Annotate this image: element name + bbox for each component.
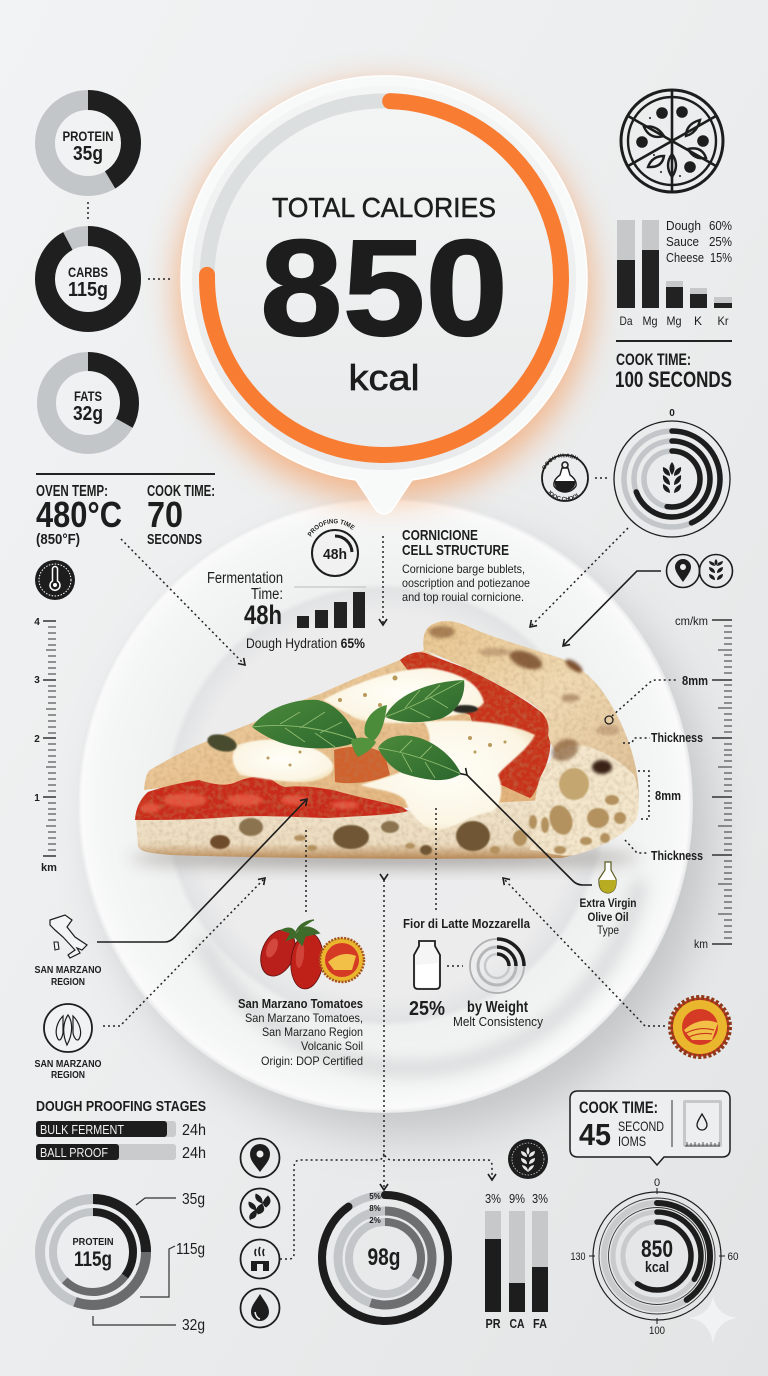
chart legend: Cheese	[666, 250, 704, 265]
icon: italy map: REGION	[51, 976, 85, 988]
donut: fats	[46, 362, 130, 444]
cornicione note: CORNICIONE	[402, 527, 478, 544]
stacked bars: pr ca fa: 3%	[532, 1191, 548, 1206]
icon: olive oil bottle: Olive Oil	[588, 910, 628, 924]
hydration label: Dough Hydration 65%	[246, 635, 365, 651]
connector dots	[595, 477, 608, 479]
fermentation block: Time:	[251, 586, 283, 603]
dough proofing stages: DOUGH PROOFING STAGES	[36, 1098, 206, 1115]
oregano flecks	[266, 676, 506, 766]
donut: carbs	[45, 236, 131, 322]
bar chart: composition: K	[694, 314, 702, 328]
main calorie gauge	[176, 76, 592, 514]
sauce front	[135, 776, 408, 820]
ruler labels: km	[41, 862, 57, 874]
crumb layer	[136, 790, 638, 859]
cook time callout: SECOND	[618, 1118, 664, 1134]
dough proofing stages	[36, 1098, 206, 1162]
calories value: 850	[260, 212, 508, 365]
icon: san marzano tomatoes badge	[34, 1004, 102, 1081]
ruler labels: Thickness	[651, 848, 703, 863]
sparkle mark	[689, 1296, 737, 1344]
donut: protein	[45, 100, 131, 186]
left ruler	[34, 617, 57, 874]
top dough	[144, 650, 548, 808]
icon: pizza	[621, 90, 723, 192]
radial gauge: wheat	[614, 408, 730, 537]
radial chart: 850 kcal: 60	[728, 1251, 738, 1263]
ball proof bar: 24h	[182, 1145, 206, 1162]
icon: drop gauge	[683, 1100, 722, 1147]
bar chart: composition: Mg	[642, 314, 658, 328]
arrows and connectors	[97, 528, 677, 1190]
donut: protein: PROTEIN	[62, 129, 114, 144]
mozzarella block: Melt Consistency	[453, 1014, 543, 1029]
ruler labels: 8mm	[682, 673, 708, 688]
icon: italy map: SAN MARZANO	[34, 964, 102, 976]
cook time: 70 seconds: 70	[147, 494, 183, 535]
chart leaders	[93, 1198, 176, 1325]
cook time: 100 seconds: COOK TIME:	[616, 351, 691, 369]
radial chart: 850 kcal: 850	[641, 1236, 673, 1263]
cook time callout: 45	[579, 1117, 611, 1152]
pizza slice	[130, 621, 640, 868]
radial chart: protein: 115g	[176, 1241, 205, 1258]
icon: proofing time dial: PROOFING TIME	[307, 518, 355, 537]
icon: proofing time dial	[307, 518, 359, 577]
cook time: 100 seconds	[615, 341, 732, 392]
fermentation block	[207, 518, 366, 651]
radial chart: 850 kcal	[570, 1177, 738, 1337]
radial chart: protein: 115g	[74, 1248, 112, 1271]
icon: italy map	[34, 915, 102, 988]
ruler labels: 8mm	[655, 788, 681, 803]
oven temperature	[36, 474, 215, 548]
mozzarella block: by Weight	[467, 999, 529, 1016]
tomato description	[238, 996, 363, 1068]
radial chart: protein: PROTEIN	[72, 1236, 114, 1248]
fermentation block: 48h	[244, 600, 282, 630]
tomato description: Volcanic Soil	[301, 1039, 363, 1053]
radial chart: 98g	[322, 1192, 448, 1321]
donut: fats: 32g	[73, 403, 103, 425]
tomato description: San Marzano Region	[262, 1025, 363, 1039]
bulk ferment bar: 24h	[182, 1122, 206, 1139]
chart legend: 60%	[709, 218, 732, 233]
sauce top	[400, 652, 550, 798]
ball proof bar: BALL PROOF	[40, 1145, 108, 1160]
icon: san marzano tomatoes badge: SAN MARZANO	[34, 1058, 102, 1070]
stacked bars: pr ca fa: PR	[486, 1316, 501, 1331]
chart legend: 25%	[709, 234, 732, 249]
connector dots	[88, 202, 172, 279]
cornicione note: and top rouial cornicione.	[402, 590, 524, 604]
bar chart: composition	[617, 218, 732, 328]
gauge track	[207, 101, 561, 455]
kcal unit: kcal	[348, 357, 420, 398]
tomato description: San Marzano Tomatoes,	[245, 1011, 363, 1025]
icon: san marzano tomatoes badge: REGION	[51, 1069, 85, 1081]
fermentation label: Fermentation	[207, 570, 283, 587]
radial chart: 98g: 2%	[369, 1216, 381, 1225]
bar chart: composition: Da	[620, 314, 633, 328]
crust cross-section	[530, 745, 639, 856]
ruler labels	[651, 614, 708, 951]
radial chart: 850 kcal: 100	[649, 1325, 665, 1337]
mozzarella	[233, 668, 535, 830]
tomato description: Origin: DOP Certified	[261, 1054, 363, 1068]
radial chart: 98g: 8%	[369, 1204, 381, 1213]
ruler labels: Thickness	[651, 730, 703, 745]
char spots	[429, 626, 620, 774]
donut: carbs: CARBS	[68, 265, 108, 280]
cook time callout: COOK TIME:	[579, 1098, 658, 1117]
radial chart: 98g: 98g	[368, 1244, 400, 1271]
icon: flask badge: JOOC CHOOI	[548, 490, 578, 500]
donut: carbs: 115g	[68, 279, 108, 301]
radial chart: 98g: 5%	[369, 1192, 381, 1201]
stacked bars: pr ca fa: 9%	[509, 1191, 525, 1206]
cornicione note: ooscription and potiezanoe	[402, 576, 530, 590]
icon: pin	[240, 1138, 280, 1178]
icon: milk bottle	[414, 941, 440, 989]
bar chart: composition: Mg	[666, 314, 682, 328]
tomato description: San Marzano Tomatoes	[238, 996, 363, 1011]
chart legend	[666, 218, 732, 265]
oven temperature: OVEN TEMP:	[36, 483, 108, 500]
icon: location pin	[666, 554, 700, 588]
dop badge small	[320, 938, 364, 982]
bulk ferment bar	[36, 1121, 206, 1139]
stacked bars: pr ca fa: 3%	[485, 1191, 501, 1206]
bar chart: composition: Kr	[718, 314, 729, 328]
ruler labels: 4	[34, 617, 40, 628]
icon: thermometer	[35, 560, 75, 600]
cook time: 70 seconds: COOK TIME:	[147, 483, 215, 500]
radial chart: protein: 35g	[182, 1191, 205, 1208]
air holes	[210, 768, 626, 855]
ruler labels	[34, 617, 57, 874]
ruler labels: 3	[34, 675, 40, 686]
icon: black wheat badge	[508, 1139, 548, 1179]
melt rings	[470, 939, 524, 993]
icon: wheat badge	[700, 554, 732, 588]
cook time: 100 seconds: 100 SECONDS	[615, 367, 732, 392]
radial chart: protein: 32g	[182, 1317, 205, 1334]
cook time: 70 seconds: SECONDS	[147, 531, 202, 548]
donut: fats: FATS	[74, 389, 102, 404]
icon: wheat	[240, 1188, 280, 1228]
gauge value arc	[201, 95, 567, 461]
oven temperature: 480°C	[36, 494, 122, 535]
crust rim	[423, 621, 639, 808]
cornicione note: CELL STRUCTURE	[402, 542, 509, 559]
icon column	[240, 1138, 280, 1328]
sauce highlights	[140, 793, 359, 813]
mozzarella block: Fior di Latte Mozzarella	[403, 916, 531, 931]
radial chart: protein	[37, 1191, 205, 1334]
herb speck	[205, 705, 478, 755]
icon: proofing time dial: 48h	[323, 546, 347, 563]
right ruler	[712, 620, 732, 944]
mozzarella block: 25%	[409, 998, 445, 1020]
branching connector	[280, 1153, 492, 1259]
icon: flask badge: OOOU KLASH	[542, 453, 578, 470]
mozzarella block	[403, 916, 543, 1029]
ruler labels: km	[694, 937, 708, 951]
radial chart: 850 kcal: kcal	[645, 1259, 669, 1276]
stacked bars: pr ca fa: FA	[533, 1316, 548, 1331]
tomatoes illustration	[254, 920, 364, 991]
icon: olive oil bottle: Type	[597, 923, 619, 937]
plate	[77, 497, 711, 1136]
donut: protein: 35g	[73, 143, 103, 165]
gauge disc with pointer	[181, 76, 587, 514]
icon: oven	[240, 1240, 280, 1278]
basil leaves	[252, 680, 464, 780]
cook time: 70 seconds	[147, 483, 215, 548]
bulk ferment bar: BULK FERMENT	[40, 1122, 124, 1137]
cook time callout: IOMS	[618, 1133, 646, 1149]
stacked bars: pr ca fa: CA	[510, 1316, 525, 1331]
ruler labels: 2	[34, 734, 40, 745]
stacked bars: pr ca fa	[485, 1191, 548, 1331]
radial gauge: wheat: 0	[669, 408, 675, 419]
icon: olive oil bottle: Extra Virgin	[580, 896, 636, 910]
cornicione note: Cornicione barge bublets,	[402, 562, 525, 576]
chart legend: 15%	[710, 250, 732, 265]
dop seal	[670, 998, 730, 1056]
chart legend: Dough	[666, 218, 701, 233]
icon: olive oil bottle	[580, 862, 636, 937]
gauge face	[192, 86, 576, 470]
icon: wheat	[663, 462, 681, 493]
ruler labels: cm/km	[675, 614, 708, 628]
icon: water drop	[240, 1288, 280, 1328]
chart legend: Sauce	[666, 234, 699, 249]
cook time callout	[570, 1091, 730, 1165]
ball proof bar	[36, 1144, 206, 1162]
icon: flask badge	[541, 453, 589, 502]
ruler labels: 1	[34, 793, 40, 804]
hydration bars	[297, 592, 365, 628]
radial chart: 850 kcal: 130	[570, 1251, 586, 1263]
radial chart: 850 kcal: 0	[654, 1177, 660, 1189]
cornicione note	[402, 527, 530, 604]
total calories label: TOTAL CALORIES	[272, 192, 496, 223]
oven temperature: (850°F)	[36, 531, 80, 548]
